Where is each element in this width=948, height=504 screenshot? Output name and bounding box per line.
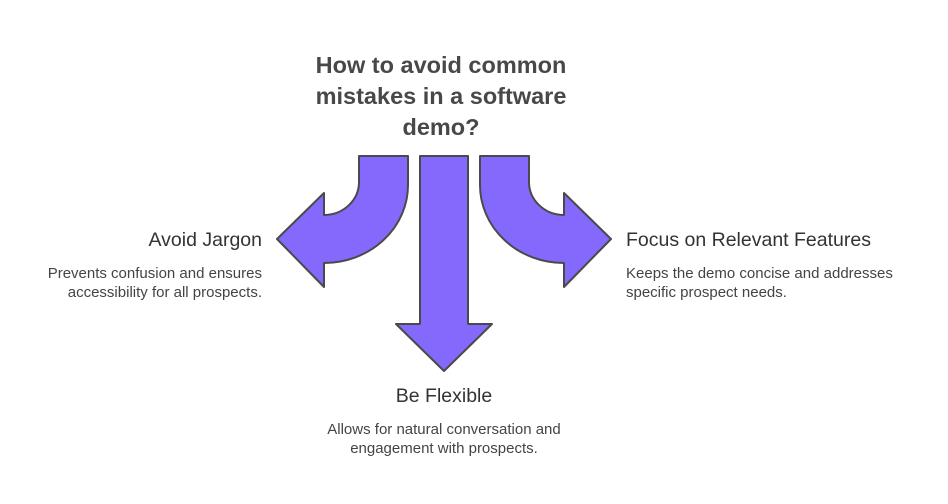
arrow: left: [277, 156, 408, 287]
text: Focus: Keeps the demo concise and addresses specific prospect needs.: [626, 265, 893, 301]
arrow: down: [396, 156, 492, 371]
heading: Avoid Jargon: Avoid Jargon: [149, 229, 262, 251]
arrow: right: [480, 156, 611, 287]
heading: Be Flexible: Be Flexible: [396, 385, 492, 407]
title: How to avoid common mistakes in a software demo?: [316, 52, 566, 140]
heading: Focus on Relevant Features: Focus on Relevant Features: [626, 229, 871, 251]
text: Avoid Jargon: Prevents confusion and ensures accessibility for all prospects.: [48, 265, 262, 301]
text: Be Flexible: Allows for natural conversation and engagement with prospects.: [327, 421, 561, 457]
